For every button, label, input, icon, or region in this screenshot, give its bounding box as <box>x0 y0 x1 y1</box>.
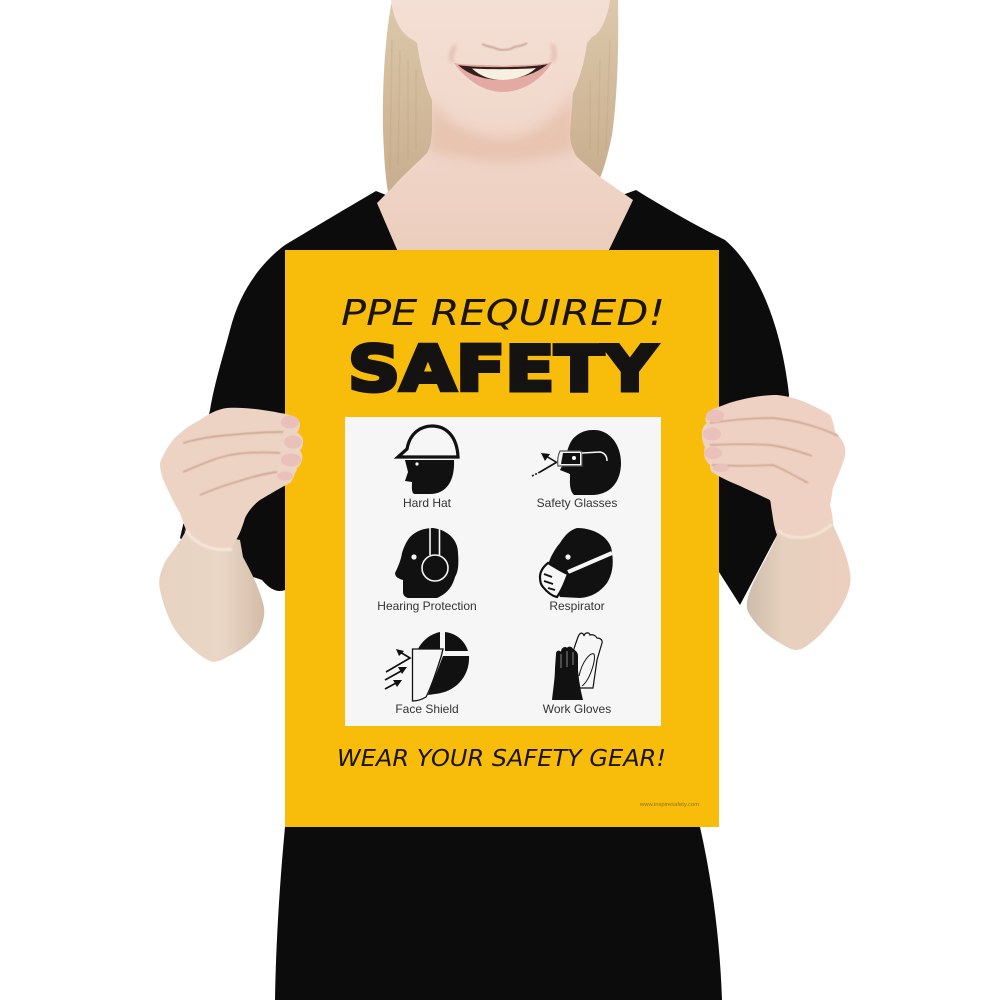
label: work gloves: Work Gloves <box>543 702 611 716</box>
person: black shirt and dress <box>180 190 789 1000</box>
panel background <box>345 417 661 726</box>
lips <box>454 62 552 92</box>
right forearm <box>747 525 851 650</box>
finger creases <box>183 432 283 495</box>
icon: hard hat <box>398 426 458 494</box>
left hand <box>160 408 303 551</box>
left forearm <box>159 528 264 662</box>
wrist crease <box>186 530 232 550</box>
wrist crease <box>778 524 832 538</box>
label: hard hat: Hard Hat <box>403 496 452 510</box>
heading: PPE required: PPE REQUIRED! <box>341 293 665 334</box>
label: hearing protection: Hearing Protection <box>377 599 477 613</box>
icon: safety glasses <box>532 430 621 495</box>
label: face shield: Face Shield <box>395 702 459 716</box>
nose <box>482 43 527 50</box>
icon: face shield <box>385 632 469 701</box>
tagline: WEAR YOUR SAFETY GEAR! <box>337 746 666 772</box>
panel: icons <box>345 417 661 726</box>
finger creases <box>710 418 838 483</box>
fingernails <box>703 410 729 472</box>
left hand and arm <box>159 408 303 662</box>
heading: safety: SAFETY <box>348 332 657 406</box>
person: hair <box>383 0 618 192</box>
right hand and arm <box>702 395 851 650</box>
icon: work gloves <box>552 633 602 700</box>
website: www.inspiresafety.com <box>640 802 699 808</box>
icon: respirator <box>540 528 613 598</box>
label: respirator: Respirator <box>549 599 605 613</box>
poster <box>285 250 719 827</box>
smile creases <box>451 44 554 62</box>
label: safety glasses: Safety Glasses <box>537 496 617 510</box>
right hand <box>702 395 845 539</box>
teeth <box>472 68 536 80</box>
person: face and neck <box>377 0 633 252</box>
chin shadow <box>428 90 575 161</box>
mouth <box>458 64 548 80</box>
poster background <box>285 250 719 827</box>
icon: hearing protection <box>395 528 458 598</box>
fingernails <box>277 416 302 480</box>
